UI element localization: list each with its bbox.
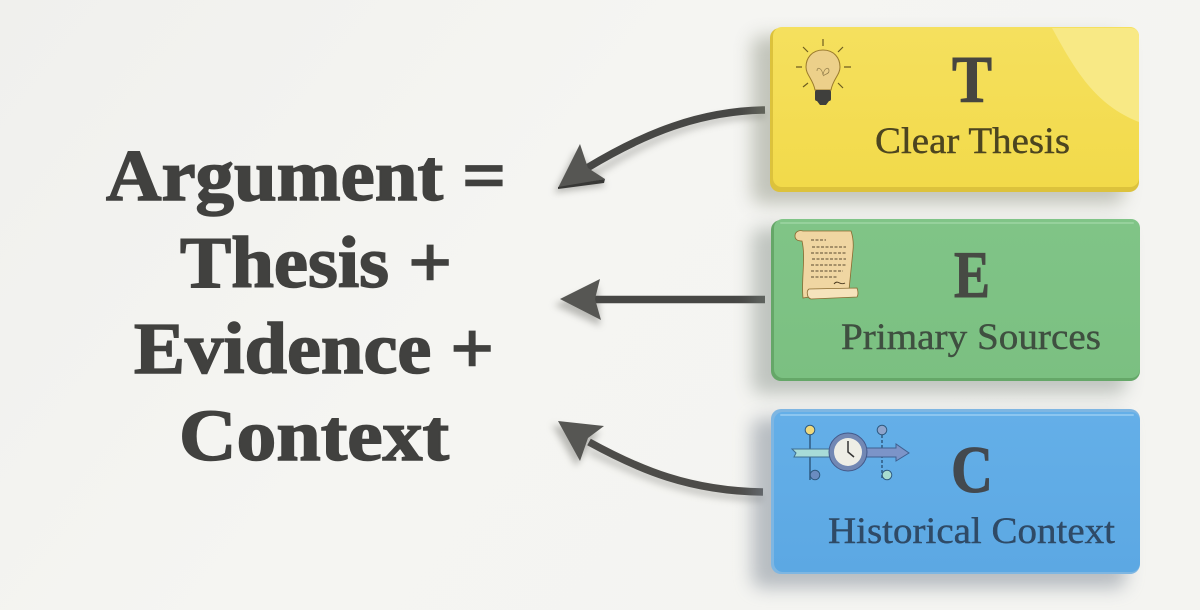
arrow: context card to equation xyxy=(552,421,763,498)
label: Clear Thesis: Clear Thesis xyxy=(875,121,1070,162)
title: Argument = Thesis + Evidence + Context xyxy=(106,135,506,476)
letter E: E xyxy=(954,238,990,312)
arrow: thesis card to equation xyxy=(554,110,765,193)
arrow: evidence card to equation xyxy=(554,279,765,326)
panel: E Primary Sources xyxy=(752,219,1140,394)
label: Primary Sources: Primary Sources xyxy=(841,317,1101,358)
icon: timeline with clock xyxy=(792,425,909,480)
panel: C Historical Context xyxy=(752,409,1140,588)
title: Argument = Thesis + Evidence + Context: Context xyxy=(179,395,449,476)
title: Argument = Thesis + Evidence + Context: Thesis + xyxy=(180,222,452,303)
title: Argument = Thesis + Evidence + Context: Evidence + xyxy=(134,308,494,389)
letter C: C xyxy=(951,433,993,507)
title: Argument = Thesis + Evidence + Context: Argument = xyxy=(106,135,506,216)
letter T: T xyxy=(952,43,992,117)
icon: light bulb xyxy=(796,39,851,105)
panel: T Clear Thesis xyxy=(752,27,1139,204)
label: Historical Context: Historical Context xyxy=(828,511,1116,552)
icon: parchment scroll xyxy=(795,231,858,299)
